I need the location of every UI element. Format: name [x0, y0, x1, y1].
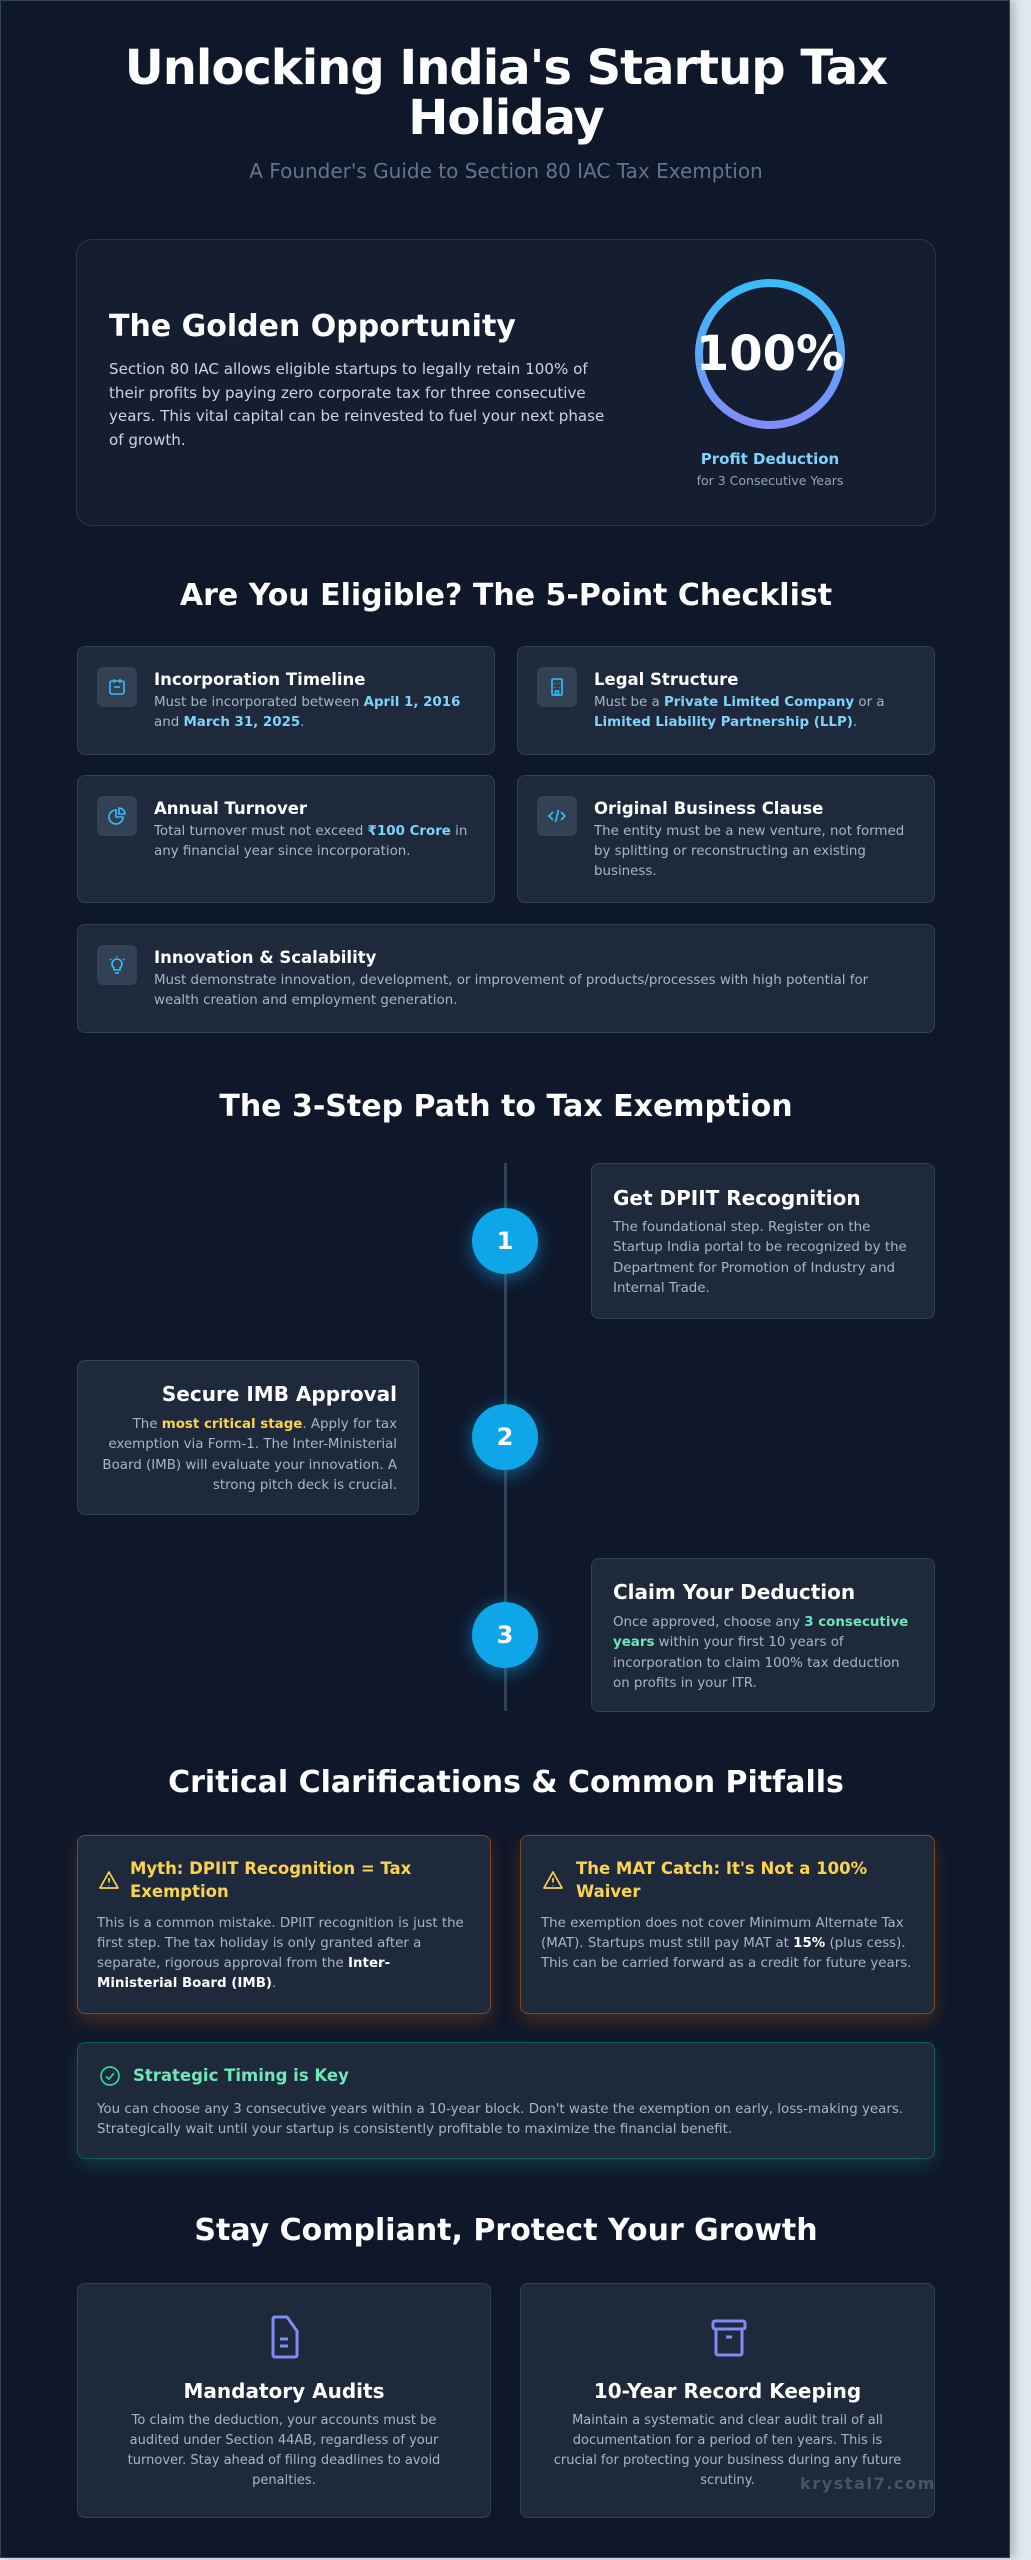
- label: profit deduction: [696, 450, 843, 488]
- text: documentation for a period of ten years. This is: [573, 2433, 882, 2448]
- title: Holiday: [408, 90, 604, 146]
- text: and March 31, 2025.: [154, 715, 304, 730]
- text: golden opportunity description: of growth.: [109, 430, 186, 448]
- text: Internal Trade.: [613, 1281, 710, 1296]
- icon: archive box: [712, 2320, 746, 2356]
- text: separate, rigorous approval from the Inter-: [97, 1956, 390, 1971]
- icon: pie chart: [97, 796, 137, 836]
- text: [97, 2102, 903, 2137]
- step 3 marker: [472, 1602, 538, 1668]
- heading: compliance: Stay Compliant, Protect Your Growth: [194, 2213, 818, 2248]
- text: Limited Liability Partnership (LLP).: [594, 715, 857, 730]
- text: Startup India portal to be recognized by the: [613, 1240, 907, 1255]
- text: years within your first 10 years of: [613, 1635, 844, 1650]
- text: any financial year since incorporation.: [154, 844, 411, 859]
- text: Must demonstrate innovation, development, or improvement of products/processes with high potential for: [154, 973, 868, 988]
- text: Ministerial Board (IMB).: [97, 1976, 276, 1991]
- title: Legal Structure: [594, 670, 738, 689]
- title: [125, 40, 888, 146]
- step 3 marker: 3: [497, 1621, 513, 1649]
- title: The MAT Catch: It's Not a 100%: [576, 1859, 867, 1878]
- text: [554, 2413, 901, 2488]
- chart: 100% ring: [695, 279, 845, 429]
- panel: golden opportunity: [76, 239, 936, 526]
- step 1 card: [591, 1163, 935, 1319]
- title: Original Business Clause: [594, 799, 823, 818]
- icon: warning: [543, 1871, 563, 1889]
- callout: myth: [77, 1835, 491, 2014]
- title: Waiver: [576, 1882, 640, 1901]
- title: Strategic Timing is Key: [133, 2066, 349, 2085]
- text: You can choose any 3 consecutive years within a 10-year block. Don't waste the exemption on early, loss-making years.: [97, 2102, 903, 2117]
- text: wealth creation and employment generation.: [154, 993, 457, 1008]
- callout: strategic timing: [77, 2042, 935, 2159]
- card: annual turnover: [77, 775, 495, 903]
- timeline line: [504, 1163, 507, 1711]
- card: incorporation timeline: [77, 646, 495, 755]
- text: by splitting or reconstructing an existing: [594, 844, 866, 859]
- text: Maintain a systematic and clear audit trail of all: [572, 2413, 883, 2428]
- text: The exemption does not cover Minimum Alternate Tax: [541, 1916, 904, 1931]
- heading: golden opportunity: The Golden Opportunity: [109, 309, 516, 344]
- text: turnover. Stay ahead of filing deadlines to avoid: [128, 2453, 440, 2468]
- text: The foundational step. Register on the: [613, 1220, 870, 1235]
- text: Once approved, choose any 3 consecutive: [613, 1615, 908, 1630]
- text: The entity must be a new venture, not formed: [594, 824, 904, 839]
- title: Claim Your Deduction: [613, 1580, 855, 1604]
- title: Exemption: [130, 1882, 229, 1901]
- step 2 card: [77, 1360, 419, 1515]
- text: [540, 1916, 911, 1971]
- icon: calendar: [97, 667, 137, 707]
- step 1 marker: [472, 1208, 538, 1274]
- text: To claim the deduction, your accounts must be: [132, 2413, 436, 2428]
- text: The most critical stage. Apply for tax: [133, 1417, 397, 1432]
- title: Innovation & Scalability: [154, 948, 376, 967]
- text: strong pitch deck is crucial.: [213, 1478, 397, 1493]
- card: record keeping: [520, 2283, 935, 2518]
- title: Get DPIIT Recognition: [613, 1186, 861, 1210]
- title: Mandatory Audits: [184, 2379, 384, 2403]
- text: penalties.: [252, 2473, 316, 2488]
- text: exemption via Form-1. The Inter-Ministerial: [108, 1437, 397, 1452]
- callout: MAT catch: [520, 1835, 935, 2014]
- icon: document: [272, 2316, 298, 2358]
- text: [154, 695, 460, 730]
- watermark: krystal7.com: [800, 2474, 936, 2493]
- text: This can be carried forward as a credit for future years.: [541, 1956, 911, 1971]
- title: [576, 1859, 867, 1901]
- title: Secure IMB Approval: [162, 1382, 397, 1406]
- text: Must be a Private Limited Company or a: [594, 695, 885, 710]
- text: [612, 1220, 907, 1296]
- step 2 marker: 2: [497, 1423, 513, 1451]
- card: mandatory audits: [77, 2283, 491, 2518]
- card: original business clause: [517, 775, 935, 903]
- text: (MAT). Startups must still pay MAT at 15% (plus cess).: [541, 1936, 906, 1951]
- title: 10-Year Record Keeping: [594, 2379, 861, 2403]
- text: golden opportunity description: years. This vital capital can be reinvested to fuel your next phase: [109, 407, 604, 425]
- label: profit deduction: Profit Deduction: [701, 450, 839, 468]
- text: business.: [594, 864, 657, 879]
- text: [96, 1916, 464, 1991]
- text: [594, 695, 885, 730]
- title: Annual Turnover: [154, 799, 307, 818]
- text: on profits in your ITR.: [613, 1676, 757, 1691]
- title: Unlocking India's Startup Tax: [125, 40, 887, 96]
- text: [128, 2413, 440, 2488]
- text: incorporation to claim 100% tax deduction: [613, 1656, 900, 1671]
- text: scrutiny.: [700, 2473, 755, 2488]
- title: [130, 1859, 411, 1901]
- text: first step. The tax holiday is only granted after a: [97, 1936, 421, 1951]
- icon: check circle: [100, 2066, 120, 2086]
- heading: pitfalls: Critical Clarifications & Common Pitfalls: [168, 1765, 844, 1800]
- card: innovation & scalability: [77, 924, 935, 1033]
- text: This is a common mistake. DPIIT recognition is just the: [97, 1916, 464, 1931]
- heading: 3-step path: The 3-Step Path to Tax Exemption: [219, 1089, 793, 1124]
- text: [154, 824, 467, 859]
- text: [594, 824, 904, 879]
- step 1 marker: 1: [497, 1227, 513, 1255]
- chart: 100% ring: 100%: [696, 326, 844, 382]
- icon: lightbulb: [97, 945, 137, 985]
- icon: building: [537, 667, 577, 707]
- text: Board (IMB) will evaluate your innovation. A: [102, 1458, 397, 1473]
- text: golden opportunity description: Section 80 IAC allows eligible startups to legally retain 100% of: [109, 360, 588, 378]
- text: crucial for protecting your business during any future: [554, 2453, 901, 2468]
- icon: code: [537, 796, 577, 836]
- text: Must be incorporated between April 1, 2016: [154, 695, 460, 710]
- text: [102, 1417, 397, 1493]
- step 2 marker: [472, 1404, 538, 1470]
- label: profit deduction: for 3 Consecutive Years: [697, 473, 843, 488]
- text: Department for Promotion of Industry and: [613, 1261, 895, 1276]
- text: audited under Section 44AB, regardless of your: [130, 2433, 438, 2448]
- icon: warning: [99, 1871, 119, 1889]
- title: Myth: DPIIT Recognition = Tax: [130, 1859, 411, 1878]
- title: Incorporation Timeline: [154, 670, 365, 689]
- text: golden opportunity description: [109, 360, 604, 448]
- text: [154, 973, 868, 1008]
- text: [613, 1615, 908, 1691]
- heading: checklist: Are You Eligible? The 5-Point Checklist: [180, 578, 832, 613]
- subtitle: A Founder's Guide to Section 80 IAC Tax Exemption: [249, 159, 763, 183]
- step 3 card: [591, 1558, 935, 1712]
- card: legal structure: [517, 646, 935, 755]
- text: Strategically wait until your startup is consistently profitable to maximize the financial benefit.: [97, 2122, 732, 2137]
- text: Total turnover must not exceed ₹100 Crore in: [154, 824, 467, 839]
- text: golden opportunity description: their profits by paying zero corporate tax for three consecutive: [109, 384, 586, 402]
